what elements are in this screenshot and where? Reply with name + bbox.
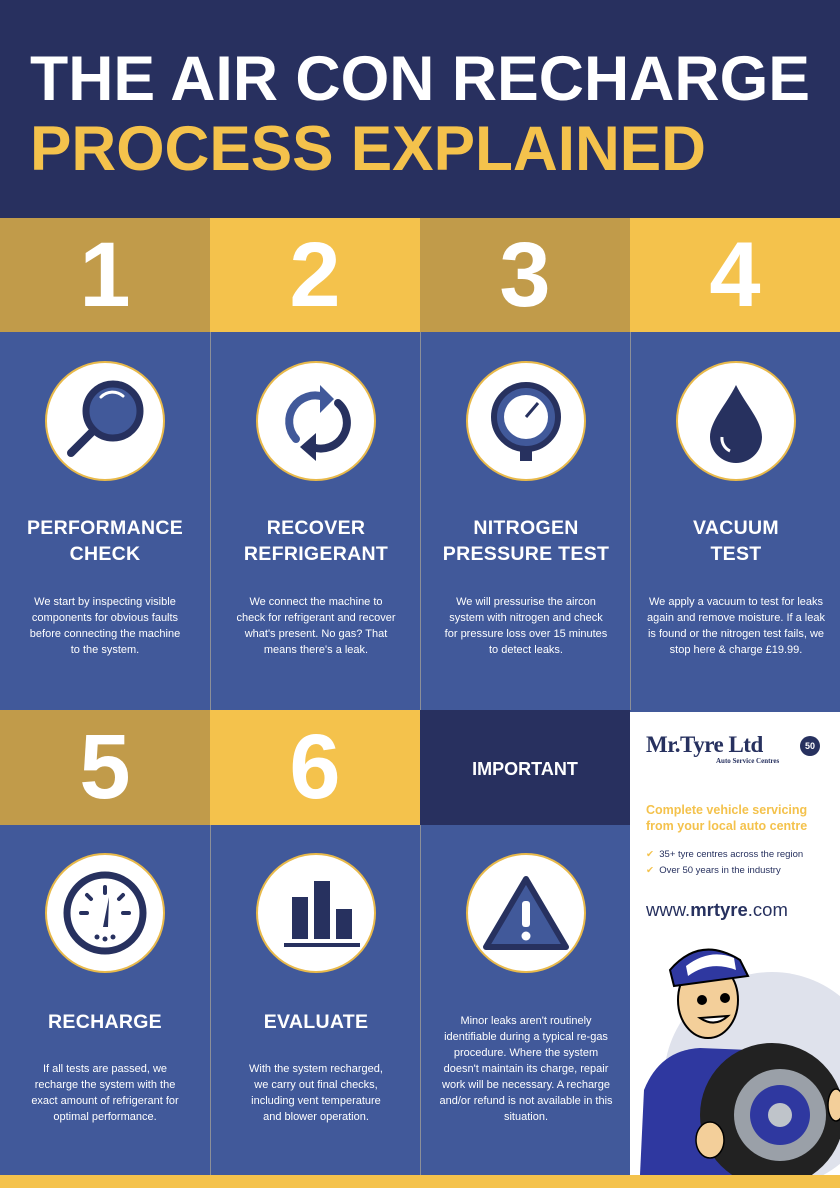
heading: REFRIGERANT bbox=[244, 543, 388, 565]
text: With the system recharged, we carry out final checks, including vent temperature and blower operation. bbox=[249, 1063, 383, 1123]
number 5: 5 bbox=[79, 716, 131, 818]
heading bbox=[244, 517, 388, 565]
heading: TEST bbox=[710, 543, 762, 565]
number 1 bbox=[0, 218, 210, 332]
icon: recycle arrows bbox=[256, 361, 376, 481]
important label: IMPORTANT bbox=[472, 759, 578, 779]
tagline: Complete vehicle servicing from your local auto centre bbox=[646, 803, 807, 833]
panel: recharge bbox=[0, 825, 210, 1175]
panel: evaluate bbox=[210, 825, 420, 1175]
logo bbox=[646, 732, 820, 765]
panel: nitrogen pressure test bbox=[420, 332, 630, 710]
title line 2: PROCESS EXPLAINED bbox=[30, 114, 706, 184]
text: We apply a vacuum to test for leaks again and remove moisture. If a leak is found or the nitrogen test fails, we stop here & charge £19.99. bbox=[647, 596, 825, 656]
text: We connect the machine to check for refrigerant and recover what's present. No gas? That means there's a leak. bbox=[237, 596, 395, 656]
number 4 bbox=[630, 218, 840, 332]
icon: drop bbox=[676, 361, 796, 481]
panel: Mr Tyre ad bbox=[630, 712, 840, 1175]
icon: speedometer bbox=[45, 853, 165, 973]
panel: recover refrigerant bbox=[210, 332, 420, 710]
icon: warning bbox=[466, 853, 586, 973]
title line 1: THE AIR CON RECHARGE bbox=[30, 44, 810, 114]
number 5 bbox=[0, 710, 210, 825]
icon: magnifier bbox=[45, 361, 165, 481]
website: www.mrtyre.com bbox=[646, 899, 788, 920]
panel: performance check bbox=[0, 332, 210, 710]
bullet list: ✔ Over 50 years in the industry bbox=[646, 865, 781, 876]
heading: PERFORMANCE bbox=[27, 517, 183, 539]
number 3 bbox=[420, 218, 630, 332]
number 6: 6 bbox=[289, 716, 341, 818]
heading bbox=[443, 517, 609, 565]
heading: VACUUM bbox=[693, 517, 779, 539]
text: We start by inspecting visible components for obvious faults before connecting the machine to the system. bbox=[30, 596, 180, 656]
heading bbox=[27, 517, 183, 565]
bullet list bbox=[646, 849, 803, 876]
logo: 50 bbox=[805, 741, 815, 751]
text: Minor leaks aren't routinely identifiable during a typical re-gas procedure. Where the system doesn't maintain its charge, repair work will be necessary. A recharge and/or refund is not available in this situation. bbox=[439, 1015, 613, 1123]
panel: important bbox=[420, 825, 630, 1175]
number 4: 4 bbox=[709, 224, 761, 326]
icon: bar chart bbox=[256, 853, 376, 973]
number 6 bbox=[210, 710, 420, 825]
important label bbox=[420, 710, 630, 825]
bullet list: ✔ 35+ tyre centres across the region bbox=[646, 849, 803, 860]
text: If all tests are passed, we recharge the system with the exact amount of refrigerant for optimal performance. bbox=[31, 1063, 179, 1123]
heading: RECOVER bbox=[267, 517, 365, 539]
logo: Mr.Tyre Ltd bbox=[646, 732, 763, 757]
heading: NITROGEN bbox=[473, 517, 579, 539]
heading: CHECK bbox=[70, 543, 140, 565]
number 2 bbox=[210, 218, 420, 332]
heading: RECHARGE bbox=[48, 1011, 162, 1033]
number 2: 2 bbox=[289, 224, 341, 326]
panel: vacuum test bbox=[630, 332, 840, 710]
header bbox=[0, 0, 840, 218]
text: We will pressurise the aircon system with nitrogen and check for pressure loss over 15 minutes to detect leaks. bbox=[445, 596, 607, 656]
heading bbox=[693, 517, 779, 565]
mascot bbox=[640, 948, 840, 1175]
icon: gauge bbox=[466, 361, 586, 481]
heading: EVALUATE bbox=[264, 1011, 368, 1033]
bottom strip bbox=[0, 1175, 840, 1188]
heading: PRESSURE TEST bbox=[443, 543, 609, 565]
number 1: 1 bbox=[79, 224, 131, 326]
number 3: 3 bbox=[499, 224, 551, 326]
logo: Auto Service Centres bbox=[716, 757, 779, 765]
